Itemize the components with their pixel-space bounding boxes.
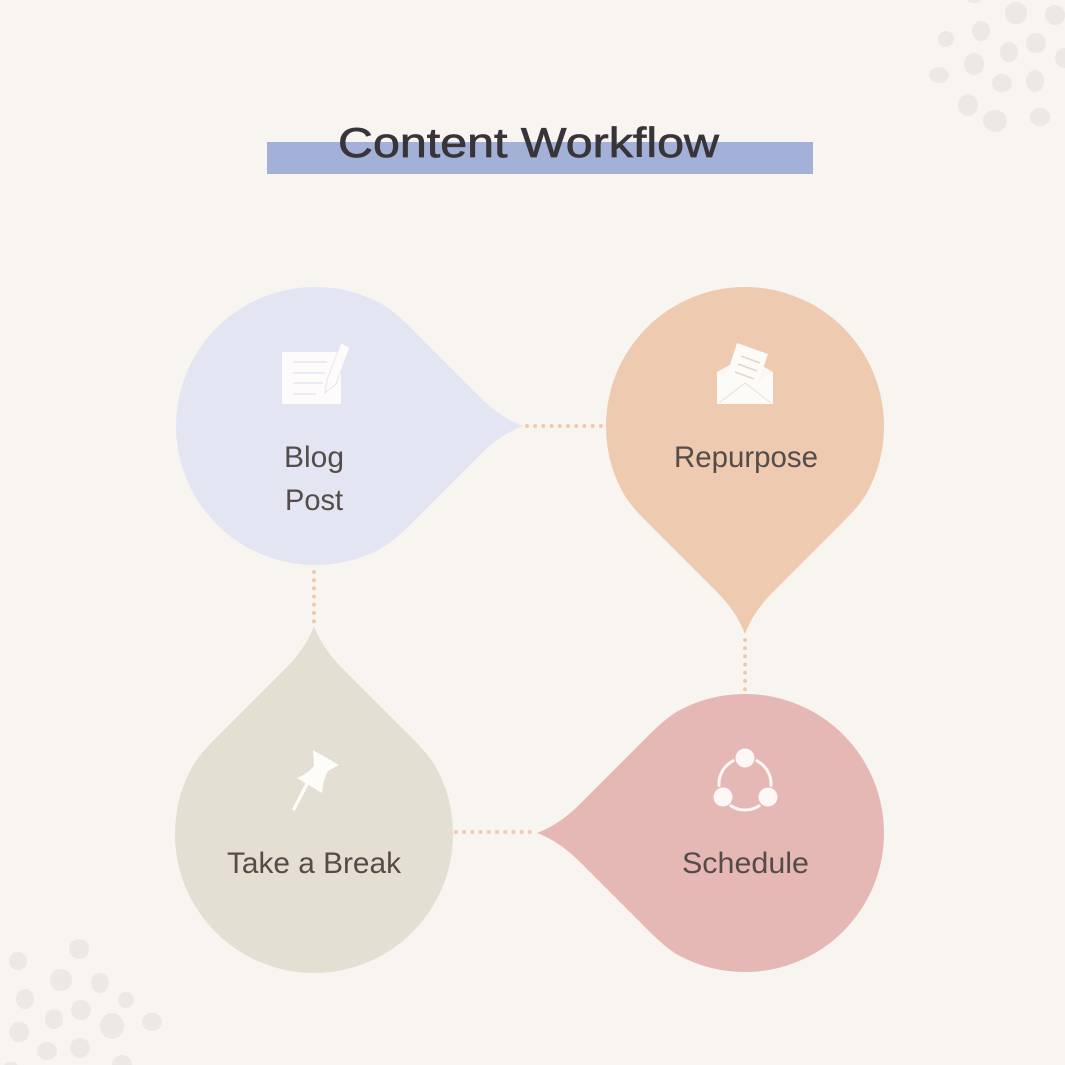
connector: take a break to blog post: [312, 572, 316, 622]
icon: push pin: [294, 750, 339, 809]
label: blog post: Blog: [284, 441, 344, 474]
panel: schedule: [537, 694, 884, 972]
title text: Content Workflow: [338, 119, 720, 166]
label: take a break: Take a Break: [227, 847, 402, 880]
label: blog post: [284, 441, 344, 517]
panel: blog post: [176, 287, 523, 565]
label: blog post: Post: [285, 484, 344, 517]
label: schedule: Schedule: [682, 847, 809, 880]
teardrop: schedule: [537, 694, 884, 972]
panel: repurpose: [606, 287, 884, 634]
title with highlight bar: [267, 119, 813, 174]
teardrop: blog post: [176, 287, 523, 565]
decorative dots: top right: [929, 0, 1065, 132]
connector: repurpose to schedule: [743, 640, 747, 690]
icon: envelope with letter: [717, 343, 773, 404]
connector: schedule to take a break: [456, 830, 530, 834]
icon: three connected circles: [714, 748, 778, 810]
title highlight bar: [267, 142, 813, 174]
panel: take a break: [175, 626, 453, 973]
icon: document and pencil: [282, 343, 350, 404]
connector: blog post to repurpose: [527, 424, 601, 428]
teardrop: take a break: [175, 626, 453, 973]
teardrop: repurpose: [606, 287, 884, 634]
label: repurpose: Repurpose: [674, 441, 818, 474]
decorative dots: bottom left: [4, 939, 162, 1065]
